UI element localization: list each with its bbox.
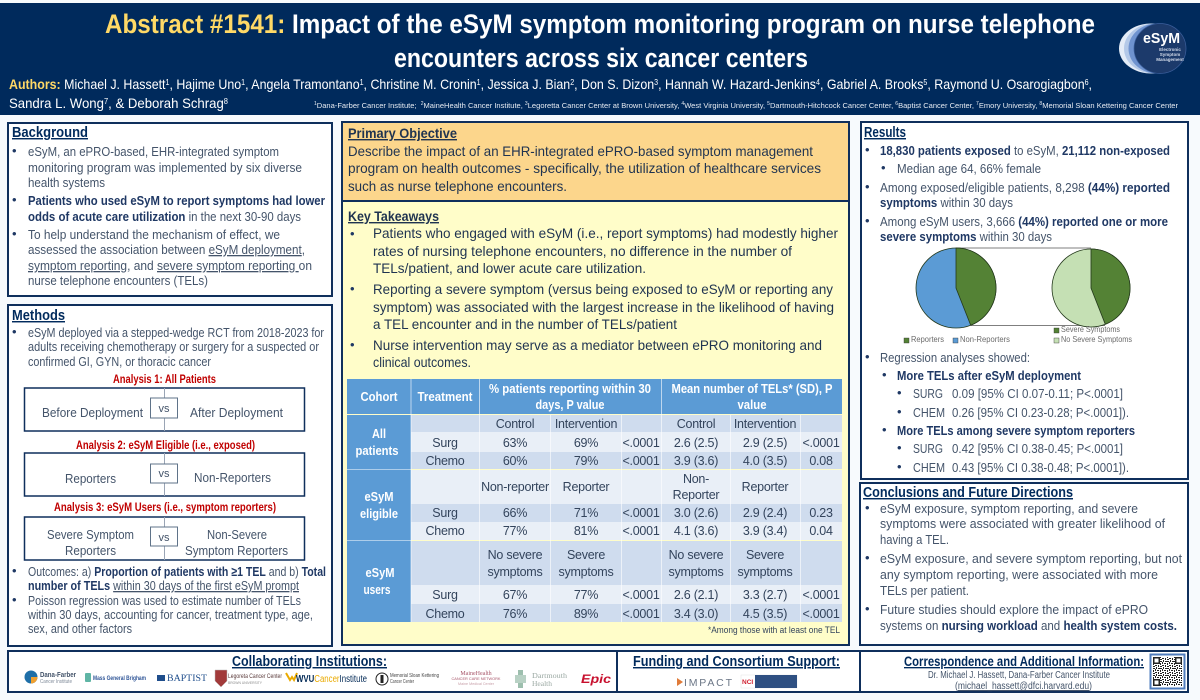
correspondence contact: [928, 670, 1110, 692]
table row: eSyM eligible: 4.1 (3.6): [674, 524, 718, 538]
conclusions bullets: systems on nursing workload and health system costs.: [880, 618, 1177, 633]
results bullets: •: [881, 160, 886, 175]
table row: eSyM users: symptoms: [488, 565, 542, 579]
table row: eSyM users: symptoms: [738, 565, 792, 579]
background bullets: monitoring program was implemented by six diverse: [28, 160, 302, 175]
background bullets: assessed the association between eSyM deployment,: [28, 242, 305, 257]
table row: all patients: Control: [677, 417, 715, 431]
regression bullets: 0.43 [95% CI 0.38-0.48; P<.0001]).: [952, 460, 1129, 475]
table row: all patients: 69%: [574, 436, 598, 450]
regression bullets: •: [897, 404, 902, 419]
logo: MaineHealth: [452, 671, 501, 686]
regression bullets: SURG: [913, 441, 943, 456]
takeaways bullets: Nurse intervention may serve as a mediator between ePRO monitoring and: [373, 337, 822, 353]
table row: eSyM eligible: Surg: [432, 506, 458, 520]
panel: conclusions: [860, 483, 1188, 645]
title: encounters across six cancer centers: [394, 43, 808, 73]
table row: all patients: 2.9 (2.5): [743, 436, 787, 450]
table row: all patients: Intervention: [734, 417, 796, 431]
table row: all patients: <.0001: [802, 436, 840, 450]
pie legend: severe: No Severe Symptoms: [1061, 334, 1132, 344]
takeaways bullets: [350, 225, 838, 370]
table row: eSyM eligible: Reporter: [673, 488, 719, 502]
logo: Dana-Farber: Cancer Institute: [40, 679, 72, 685]
table row: eSyM eligible: Non-: [683, 472, 709, 486]
analysis 2: vs: [158, 468, 170, 480]
regression bullets: •: [865, 349, 870, 364]
regression bullets: 0.26 [95% CI 0.23-0.28; P<.0001]).: [952, 405, 1129, 420]
logo: Memorial Sloan Kettering: Cancer Center: [390, 679, 414, 685]
regression bullets: SURG: [913, 386, 943, 401]
conclusions bullets: •: [865, 601, 870, 616]
results table: [347, 379, 842, 622]
table row: all patients: 79%: [574, 454, 598, 468]
header banner: [0, 3, 1200, 115]
panel: background: [8, 123, 332, 296]
table row: eSyM users: Severe: [567, 548, 605, 562]
pie chart: reporters: [916, 248, 996, 328]
table row: eSyM users: 89%: [574, 607, 598, 621]
results heading: Results: [864, 125, 906, 141]
methods intro bullet: •: [12, 324, 17, 339]
logo: Legorreta: [215, 670, 282, 687]
analysis 3: [24, 502, 304, 560]
methods outcomes bullets: Outcomes: a) Proportion of patients with ≥1 TEL and b) Total: [28, 564, 326, 579]
analysis 3: Reporters: [65, 543, 116, 558]
methods outcomes bullets: [12, 563, 326, 636]
icon: eSyM logo: [1119, 24, 1186, 74]
table header: Treatment: [418, 389, 473, 404]
methods intro bullet: confirmed GI, GYN, or thoracic cancer: [28, 354, 212, 369]
background bullets: To help understand the mechanism of effect, we: [28, 227, 280, 242]
background bullets: •: [12, 192, 17, 207]
table row: eSyM users: [425, 548, 840, 621]
takeaways bullets: clinical outcomes.: [373, 354, 471, 370]
table row: eSyM users: 2.6 (2.1): [674, 588, 718, 602]
regression bullets: •: [897, 459, 902, 474]
results bullets: •: [865, 142, 870, 157]
table row: eSyM users: symptoms: [559, 565, 613, 579]
cohort labels: [356, 426, 398, 597]
regression bullets: 0.09 [95% CI 0.07-0.11; P<.0001]: [952, 386, 1123, 401]
table row: eSyM eligible: 77%: [503, 524, 527, 538]
table row: eSyM users: Severe: [746, 548, 784, 562]
table header: % patients reporting within 30: [489, 381, 651, 396]
takeaways bullets: •: [350, 281, 355, 296]
icon: eSyM logo: Management: [1156, 57, 1184, 62]
background bullets: health systems: [28, 175, 105, 190]
panel: correspondence: [860, 651, 1188, 692]
conclusions bullets: eSyM exposure, symptom reporting, and severe: [880, 501, 1138, 516]
methods heading: Methods: [12, 308, 65, 324]
table row: eSyM eligible: Chemo: [425, 524, 465, 538]
regression bullets: •: [882, 367, 887, 382]
takeaways bullets: •: [350, 337, 355, 352]
regression bullets: [865, 349, 1135, 475]
analysis 1: [24, 374, 304, 431]
takeaways bullets: Patients who engaged with eSyM (i.e., report symptoms) had modestly higher: [373, 225, 838, 241]
logo: NCI: [741, 675, 797, 688]
table row: eSyM eligible: <.0001: [622, 524, 660, 538]
conclusions bullets: •: [865, 500, 870, 515]
table row: eSyM users: <.0001: [802, 588, 840, 602]
table row: all patients: <.0001: [622, 454, 660, 468]
logo: Memorial Sloan Kettering: [376, 673, 439, 685]
logo: Dartmouth Health: Health: [532, 679, 552, 688]
pie legend: reporters: [904, 334, 1010, 344]
table row: eSyM users: <.0001: [622, 588, 660, 602]
background bullets: nurse telephone encounters (TELs): [28, 273, 208, 288]
methods outcomes bullets: sex, and other factors: [28, 621, 132, 636]
logo: Dana-Farber: Dana-Farber: [40, 670, 76, 679]
logo: NCI: NCI: [742, 679, 753, 686]
title: [105, 9, 1095, 73]
methods outcomes bullets: Poisson regression was used to estimate number of TELs: [28, 593, 301, 608]
table row: eSyM users: <.0001: [802, 607, 840, 621]
results bullets: severe symptoms within 30 days: [880, 229, 1052, 244]
background heading: Background: [12, 125, 88, 141]
results bullets: •: [865, 179, 870, 194]
background bullets: Patients who used eSyM to report symptoms had lower: [28, 193, 325, 208]
conclusions bullets: •: [865, 550, 870, 565]
results bullets: [865, 142, 1170, 244]
panel: collaborating institutions: [8, 651, 617, 692]
table row: eSyM eligible: 66%: [503, 506, 527, 520]
table row: eSyM eligible: 71%: [574, 506, 598, 520]
regression bullets: CHEM: [913, 460, 945, 475]
objective heading: Primary Objective: [348, 125, 457, 141]
analysis 1: Before Deployment: [42, 405, 143, 420]
takeaways bullets: a TEL encounter and in the number of TELs/patient: [373, 316, 677, 332]
results bullets: 18,830 patients exposed to eSyM, 21,112 non-exposed: [880, 143, 1170, 158]
panel: methods: [8, 305, 332, 646]
cohort labels: eSyM: [366, 565, 394, 580]
table row bands: [347, 379, 842, 622]
authors: Sandra L. Wong7, & Deborah Schrag8: [9, 95, 229, 111]
methods intro bullet: adults receiving chemotherapy or surgery for a suspected or: [28, 339, 320, 354]
table row: all patients: 0.08: [809, 454, 833, 468]
conclusions bullets: having a TEL.: [880, 532, 949, 547]
table row: eSyM eligible: Non-reporter: [481, 480, 549, 494]
background bullets: odds of acute care utilization in the next 30-90 days: [28, 209, 301, 224]
table row: eSyM users: 77%: [574, 588, 598, 602]
background bullets: eSyM, an ePRO-based, EHR-integrated symptom: [28, 144, 279, 159]
icon: eSyM logo: eSyM: [1143, 30, 1180, 47]
conclusions bullets: [865, 500, 1182, 633]
logo: Dana-Farber: [24, 670, 76, 685]
table row: eSyM eligible: 2.9 (2.4): [743, 506, 787, 520]
table header: Mean number of TELs* (SD), P: [672, 381, 833, 396]
logo: Mass General Brigham: Mass General Brigham: [93, 675, 146, 682]
pie legend: severe: Severe Symptoms: [1061, 324, 1120, 334]
analysis 3: Non-Severe: [207, 527, 267, 542]
logo: MaineHealth: Maine Medical Center: [458, 682, 495, 686]
methods outcomes bullets: number of TELs within 30 days of the first eSyM prompt: [28, 578, 299, 593]
logo: Legorreta: Legoreta Cancer Center: [228, 674, 282, 680]
table header: Cohort: [360, 389, 398, 404]
cohort labels: users: [364, 582, 390, 597]
methods outcomes bullets: •: [12, 563, 17, 578]
conclusions bullets: TELs per patient.: [880, 583, 969, 598]
logo: MaineHealth: MaineHealth: [460, 671, 492, 677]
analysis 1: Analysis 1: All Patients: [113, 374, 216, 386]
methods intro bullet: [12, 324, 325, 369]
table row: eSyM users: Surg: [432, 588, 458, 602]
cohort labels: patients: [356, 443, 398, 458]
regression bullets: 0.42 [95% CI 0.38-0.45; P<.0001]: [952, 441, 1123, 456]
panel: primary objective: [342, 122, 849, 201]
authors: [9, 76, 1092, 111]
takeaways bullets: rates of nursing telephone encounters, no difference in the number of: [373, 243, 792, 259]
table row: eSyM eligible: 3.0 (2.6): [674, 506, 718, 520]
analysis 3: Analysis 3: eSyM Users (i.e., symptom reporters): [54, 502, 276, 514]
analysis 1: After Deployment: [190, 405, 283, 420]
takeaways bullets: Reporting a severe symptom (versus being exposed to eSyM or reporting any: [373, 281, 833, 297]
correspondence contact: Dr. Michael J. Hassett, Dana-Farber Cancer Institute: [928, 670, 1110, 681]
logo: Epic: Epic: [581, 672, 611, 686]
connector lines between pies: [956, 248, 1105, 326]
logo: MaineHealth: CANCER CARE NETWORK: [452, 676, 501, 681]
analysis 3: Symptom Reporters: [185, 543, 288, 558]
analysis 1: vs: [158, 403, 170, 415]
objective text: [348, 143, 821, 194]
table row: all patients: 3.9 (3.6): [674, 454, 718, 468]
table header: value: [738, 397, 766, 412]
logo: Dartmouth Health: [515, 670, 567, 688]
affiliations: 1Dana-Farber Cancer Institute; 2MaineHealth Cancer Institute, 3Legoretta Cancer Center at Brown University, 4West Virginia University, 5Dartmouth-Hitchcock Cancer Center, 6Baptist Cancer Center, 7Emory University, 8Memorial Sloan Kettering Cancer Center: [314, 101, 1179, 110]
table row: all patients: 4.0 (3.5): [743, 454, 787, 468]
regression bullets: More TELs among severe symptom reporters: [897, 423, 1135, 438]
table row: eSyM eligible: 3.9 (3.4): [743, 524, 787, 538]
results bullets: Among eSyM users, 3,666 (44%) reported one or more: [880, 214, 1168, 229]
icon: eSyM logo: Symptom: [1160, 52, 1180, 57]
analysis 3: Severe Symptom: [47, 527, 134, 542]
correspondence heading: Correspondence and Additional Information:: [904, 654, 1144, 669]
table row: eSyM eligible: Reporter: [563, 480, 609, 494]
title: Abstract #1541: Impact of the eSyM symptom monitoring program on nurse telephone: [105, 9, 1095, 39]
table row: eSyM eligible: [425, 472, 833, 538]
analysis 2: [24, 440, 304, 496]
pie chart: severe symptoms: [1052, 249, 1130, 327]
analysis 2: Analysis 2: eSyM Eligible (i.e., exposed): [76, 440, 255, 452]
analysis 2: Reporters: [65, 471, 116, 486]
pie legend: reporters: Reporters: [911, 334, 944, 344]
cohort labels: eSyM: [364, 489, 394, 504]
table header: days, P value: [536, 397, 604, 412]
table row: eSyM users: 4.5 (3.5): [743, 607, 787, 621]
table row: eSyM users: <.0001: [622, 607, 660, 621]
logo: Mass General Brigham: [85, 673, 146, 682]
table row: all patients: <.0001: [622, 436, 660, 450]
table column dividers: [347, 379, 801, 622]
conclusions heading: Conclusions and Future Directions: [863, 485, 1073, 501]
results bullets: Median age 64, 66% female: [897, 161, 1041, 176]
analysis 3: vs: [158, 532, 170, 544]
logo: Memorial Sloan Kettering: Memorial Sloan Kettering: [390, 673, 439, 679]
table row: eSyM users: Chemo: [425, 607, 465, 621]
conclusions bullets: symptoms were associated with greater likelihood of: [880, 516, 1165, 531]
table footnote: *Among those with at least one TEL: [708, 625, 840, 635]
methods intro bullet: eSyM deployed via a stepped-wedge RCT from 2018-2023 for: [28, 325, 325, 340]
table row: all patients: 63%: [503, 436, 527, 450]
panel: results: [861, 122, 1188, 479]
background bullets: •: [12, 143, 17, 158]
table row: eSyM eligible: Reporter: [742, 480, 788, 494]
institutions heading: Collaborating Institutions:: [232, 654, 387, 670]
background bullets: [12, 143, 325, 288]
conclusions bullets: any symptom reporting, were associated with more: [880, 567, 1158, 582]
takeaways bullets: symptom) was associated with the largest increase in the likelihood of having: [373, 299, 834, 315]
background bullets: symptom reporting, and severe symptom reporting on: [28, 258, 312, 273]
results bullets: •: [865, 213, 870, 228]
regression bullets: •: [882, 422, 887, 437]
table row: all patients: 60%: [503, 454, 527, 468]
takeaways bullets: •: [350, 226, 355, 241]
authors: Authors: Michael J. Hassett1, Hajime Uno1, Angela Tramontano1, Christine M. Cronin1, Jessica J. Bian2, Don S. Dizon3, Hannah W. Hazard-Jenkins4, Gabriel A. Brooks5, Raymond U. Osarogiagbon6,: [9, 76, 1092, 92]
table row: eSyM users: No severe: [669, 548, 724, 562]
regression bullets: •: [897, 440, 902, 455]
table row: eSyM eligible: 0.04: [809, 524, 833, 538]
objective text: program on health outcomes - specifically, the utilization of healthcare services: [348, 160, 821, 176]
regression bullets: Regression analyses showed:: [880, 350, 1030, 365]
cohort labels: eligible: [360, 506, 398, 521]
table header: [360, 381, 833, 412]
table row: eSyM users: No severe: [488, 548, 543, 562]
table row: all patients: Surg: [432, 436, 458, 450]
conclusions bullets: eSyM exposure, and severe symptom reporting, but not: [880, 551, 1182, 566]
results bullets: Among exposed/eligible patients, 8,298 (44%) reported: [880, 180, 1170, 195]
conclusions bullets: Future studies should explore the impact of ePRO: [880, 602, 1148, 617]
funding heading: Funding and Consortium Support:: [633, 654, 840, 670]
methods outcomes bullets: •: [12, 592, 17, 607]
correspondence contact: (michael_hassett@dfci.harvard.edu): [955, 681, 1092, 692]
panel: key takeaways: [342, 201, 849, 645]
table row: eSyM eligible: 0.23: [809, 506, 833, 520]
regression bullets: CHEM: [913, 405, 945, 420]
methods outcomes bullets: within 30 days, accounting for cancer, treatment type, age,: [27, 607, 313, 622]
icon: QR code: [1150, 654, 1184, 688]
logo: Legorreta: BROWN UNIVERSITY: [228, 680, 262, 685]
table row: eSyM users: 3.3 (2.7): [743, 588, 787, 602]
table row: eSyM users: symptoms: [669, 565, 723, 579]
table row: eSyM users: 3.4 (3.0): [674, 607, 718, 621]
takeaways bullets: TELs/patient, and lower acute care utilization.: [373, 260, 646, 276]
regression bullets: •: [897, 385, 902, 400]
table row: all patients: 2.6 (2.5): [674, 436, 718, 450]
logo: IMPACT: IMPACT: [684, 677, 733, 689]
results bullets: symptoms within 30 days: [880, 195, 1013, 210]
logo: Dartmouth Health: Dartmouth: [532, 671, 567, 680]
pie legend: severe: [1054, 324, 1132, 344]
takeaways heading: Key Takeaways: [348, 208, 439, 224]
table row: all patients: Intervention: [555, 417, 617, 431]
table row: eSyM users: 76%: [503, 607, 527, 621]
table row: all patients: Chemo: [425, 454, 465, 468]
table row: eSyM eligible: 81%: [574, 524, 598, 538]
table row: all patients: Control: [496, 417, 534, 431]
objective text: Describe the impact of an EHR-integrated ePRO-based symptom management: [348, 143, 813, 159]
table row: eSyM users: 67%: [503, 588, 527, 602]
regression bullets: More TELs after eSyM deployment: [897, 368, 1082, 383]
table row: eSyM eligible: <.0001: [622, 506, 660, 520]
analysis 2: Non-Reporters: [194, 470, 271, 485]
background bullets: •: [12, 226, 17, 241]
objective text: such as nurse telephone encounters.: [348, 178, 567, 194]
icon: eSyM logo: Electronic: [1159, 47, 1181, 52]
logo: Baptist: BAPTIST: [167, 673, 208, 683]
table row: all patients: [425, 417, 840, 468]
logo: WVU: WVUCancerInstitute: [296, 674, 367, 685]
cohort labels: All: [372, 426, 386, 441]
panel: funding: [617, 651, 860, 692]
pie legend: reporters: Non-Reporters: [960, 334, 1010, 344]
